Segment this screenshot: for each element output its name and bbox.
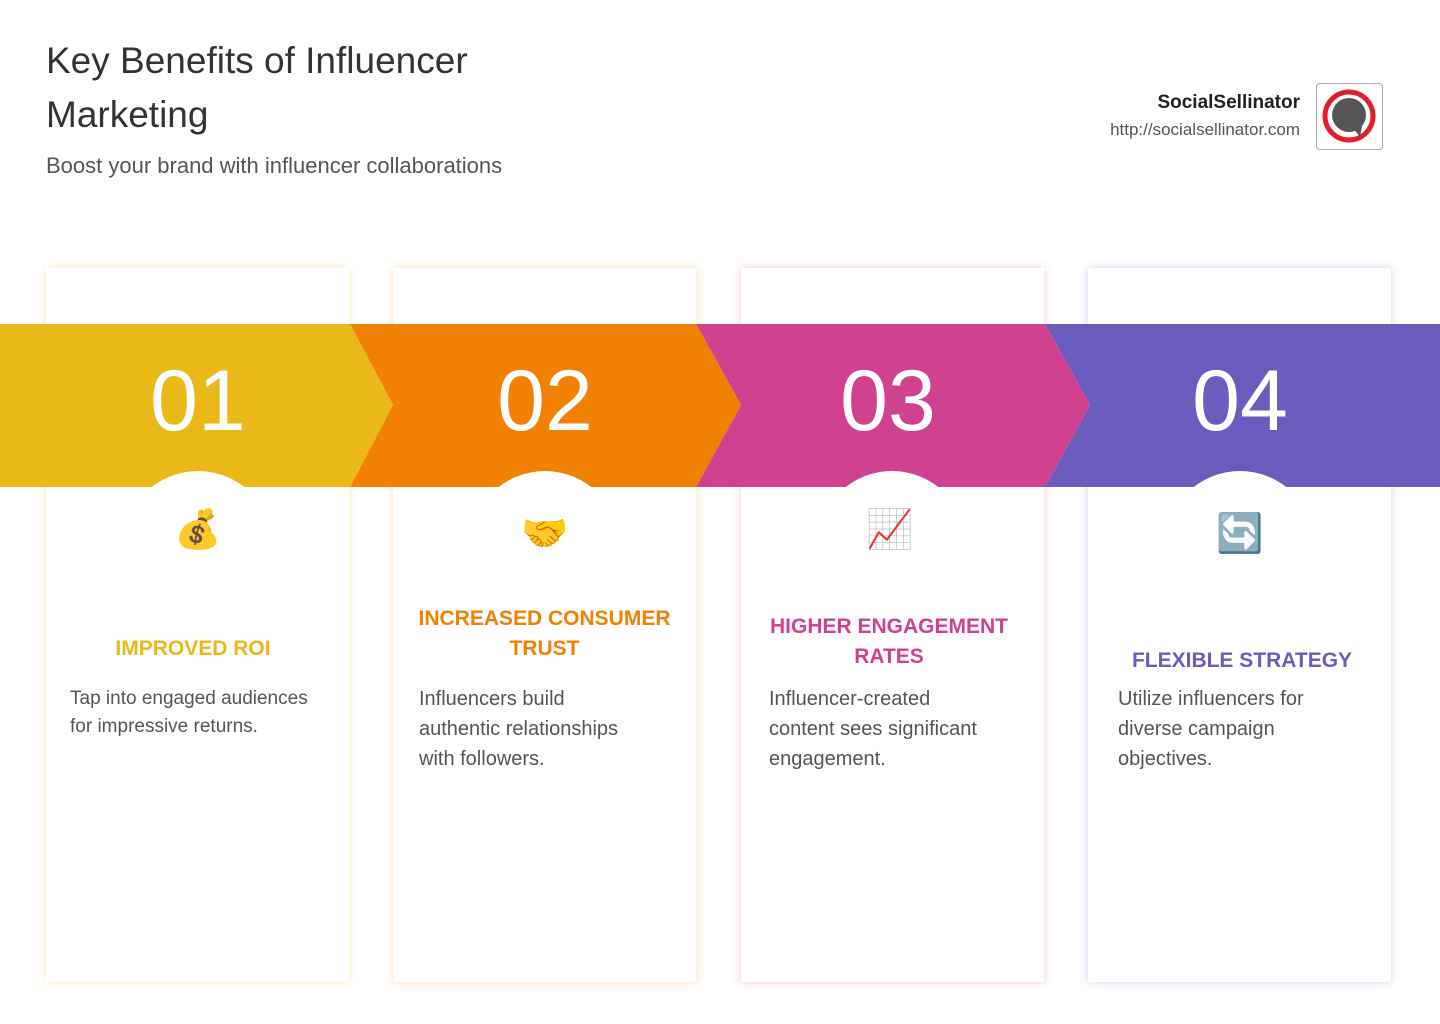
number 04: 04 [1192, 353, 1288, 449]
icon: logo [1316, 83, 1383, 150]
title: Key Benefits of Influencer Marketing [46, 40, 468, 135]
text 3: Influencer-created content sees significant engagement. [769, 688, 977, 770]
icon: refresh: 🔄 [1216, 513, 1264, 555]
heading 3: HIGHER ENGAGEMENT RATES [770, 615, 1008, 668]
heading 2: INCREASED CONSUMER TRUST [418, 607, 671, 660]
text 4: Utilize influencers for diverse campaign objectives. [1118, 688, 1304, 770]
panel: card 4 [1088, 268, 1391, 982]
icon: handshake: 🤝 [521, 513, 569, 555]
number 03: 03 [840, 353, 936, 449]
number 01: 01 [150, 353, 246, 449]
panel: card 1 [46, 268, 349, 982]
heading 1: IMPROVED ROI [115, 637, 271, 660]
brand url: http://socialsellinator.com [1110, 120, 1300, 139]
brand block [1110, 83, 1383, 150]
icon: chart: 📈 [866, 509, 914, 551]
panel: card 3 [741, 268, 1044, 982]
brand name: SocialSellinator [1157, 92, 1300, 113]
text 1: Tap into engaged audiences for impressive returns. [70, 688, 308, 737]
subtitle: Boost your brand with influencer collaborations [46, 153, 502, 178]
heading 4: FLEXIBLE STRATEGY [1132, 649, 1352, 672]
panel: card 2 [393, 268, 696, 982]
text 2: Influencers build authentic relationships with followers. [419, 688, 618, 770]
icon: money bag: 💰 [174, 509, 222, 551]
number 02: 02 [497, 353, 593, 449]
